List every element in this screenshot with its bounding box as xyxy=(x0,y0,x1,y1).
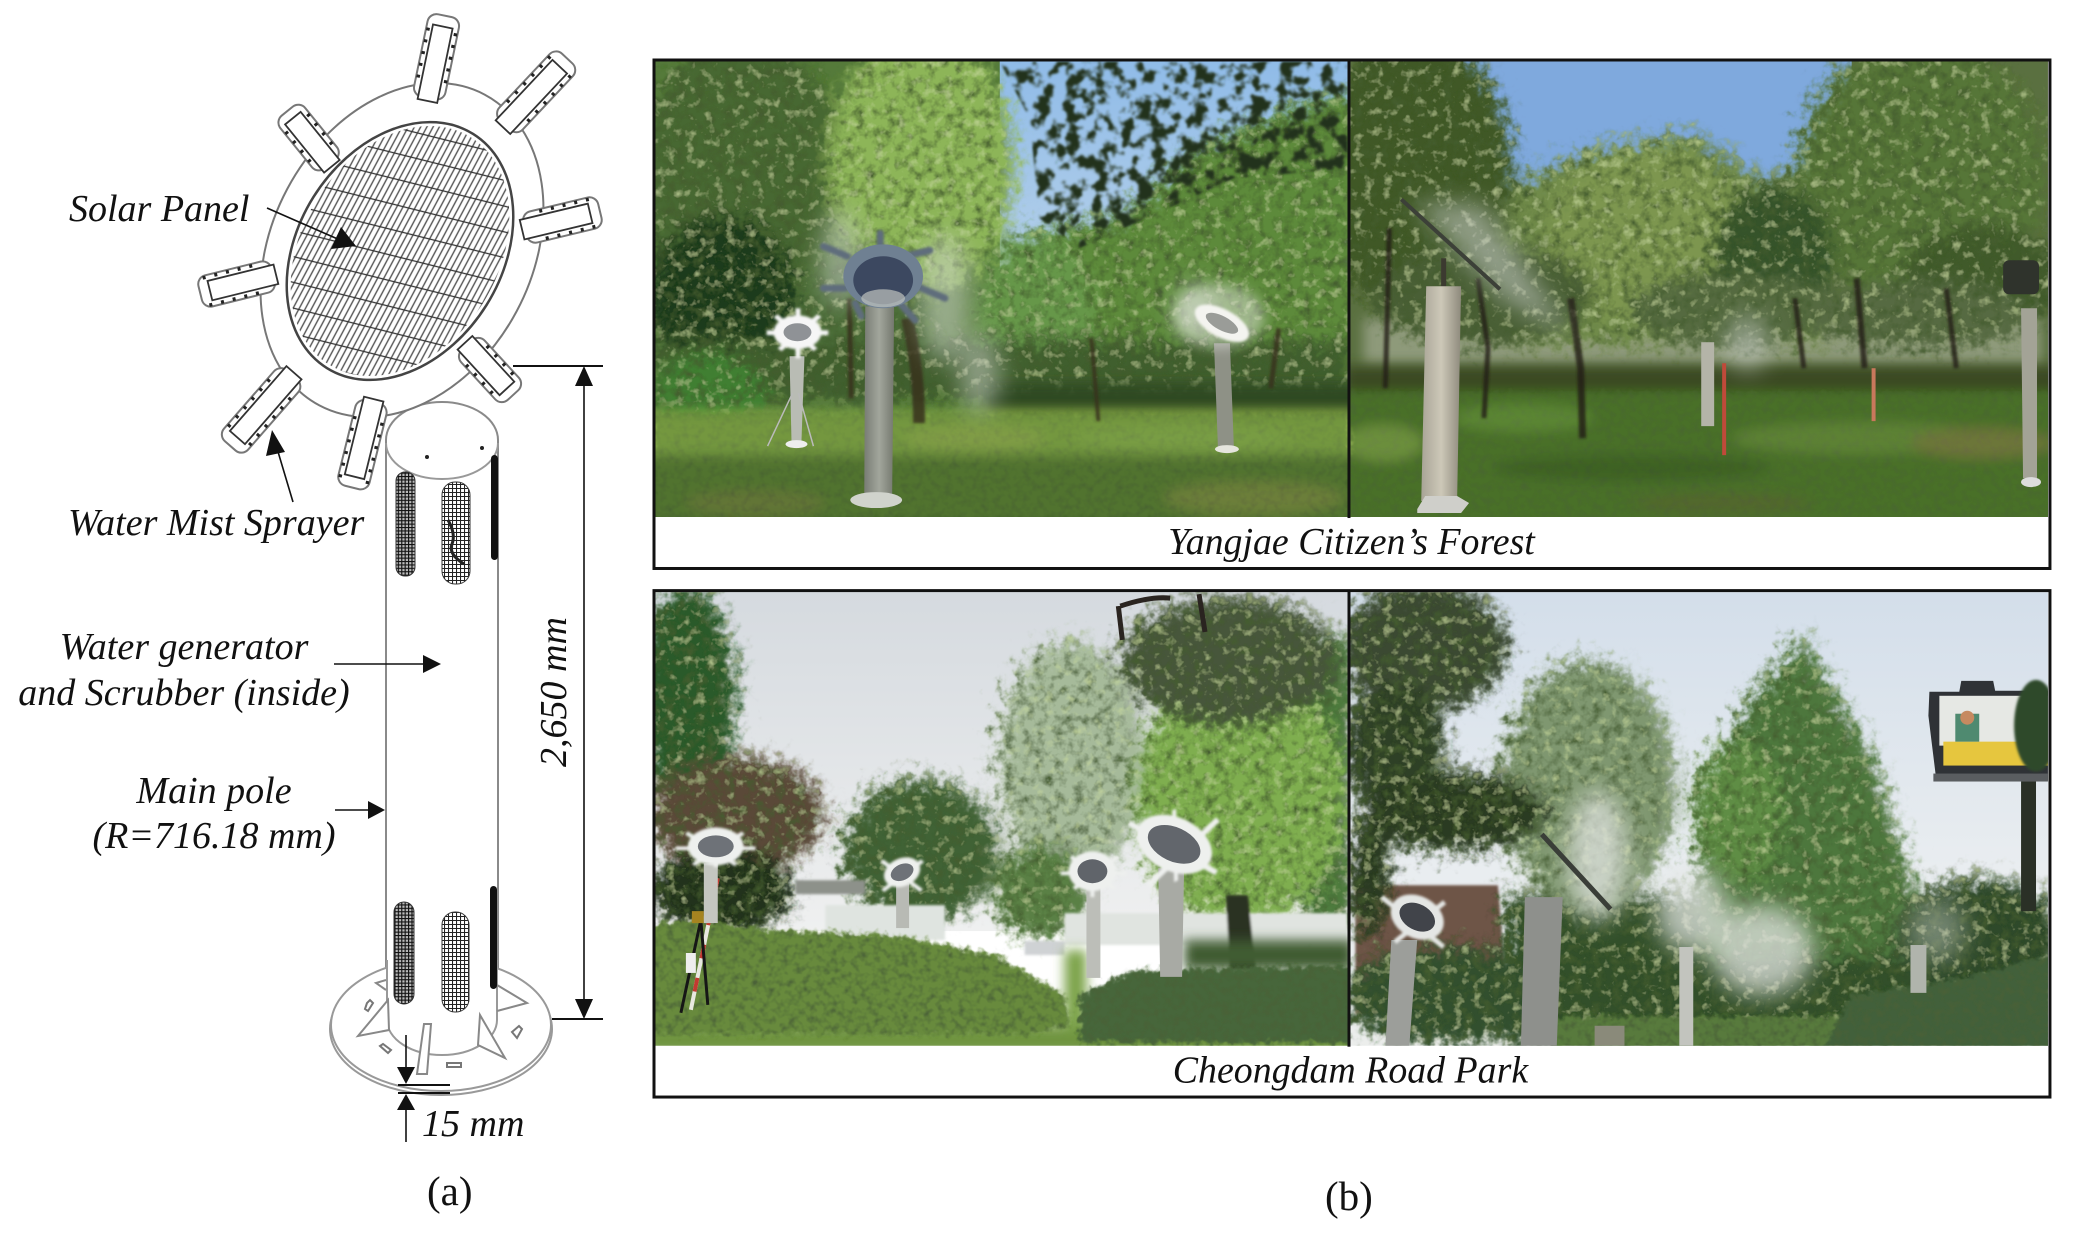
equipment box xyxy=(1595,1026,1624,1046)
trunks xyxy=(1385,228,1956,438)
hedge and grass xyxy=(1553,955,2051,1052)
dimension: height 2,650 mm: 2,650 mm xyxy=(533,617,575,767)
panel (b): Cheongdam Road Park photos xyxy=(636,581,2061,1097)
branch xyxy=(1118,594,1205,640)
arrow: main pole xyxy=(335,801,385,819)
label: solar panel: Solar Panel xyxy=(69,188,249,230)
label: water generator and scrubber: Water generator xyxy=(60,626,309,668)
label: water mist sprayer: Water Mist Sprayer xyxy=(68,502,364,544)
photo: Yangjae left view xyxy=(656,62,1348,517)
tree canopy xyxy=(1350,62,2048,364)
panel (a): sprayer technical drawing xyxy=(18,13,604,1214)
sprayer A xyxy=(676,827,756,923)
base plate xyxy=(330,940,552,1095)
photo: Cheongdam left view xyxy=(636,586,1363,1055)
divider xyxy=(1347,591,1350,1047)
photo: Cheongdam right view xyxy=(1339,581,2061,1052)
caption (a): (a) xyxy=(427,1168,473,1214)
photo: Yangjae right view xyxy=(1350,62,2048,517)
overhanging dark leaves xyxy=(1000,61,1347,248)
dimension: thickness 15 mm xyxy=(397,1035,524,1145)
sprayer: large pole, side view xyxy=(1521,834,1611,1047)
sprayer: small pole xyxy=(1679,947,1693,1047)
hedge and grass xyxy=(1344,366,2061,521)
arrow: solar panel xyxy=(267,208,356,249)
dimension: height 2,650 mm xyxy=(513,366,603,1019)
sprayer: centre dark xyxy=(823,233,945,508)
hedge and grass xyxy=(646,383,1363,526)
sprayer: left white xyxy=(767,308,828,448)
main pole xyxy=(386,402,498,1056)
panel (b): Yangjae Citizen's Forest photos xyxy=(636,34,2061,568)
sprayer: right xyxy=(1173,284,1265,453)
sprayer: right edge xyxy=(2003,260,2041,487)
solar panel xyxy=(285,120,514,382)
mist xyxy=(820,208,1214,413)
mist xyxy=(1568,790,1966,995)
building xyxy=(1355,885,1508,1015)
divider xyxy=(1347,60,1350,518)
caption: Yangjae Citizen's Forest: Yangjae Citizen’s Forest xyxy=(1168,521,1536,563)
sprayer D xyxy=(1127,803,1222,977)
tree canopy xyxy=(636,586,1353,938)
ranging pole xyxy=(1872,368,1876,421)
caption (b): (b) xyxy=(1325,1173,1373,1219)
sky xyxy=(1000,62,1348,268)
label: main pole: Main pole xyxy=(135,770,292,812)
lower ventilation slots xyxy=(394,886,497,1012)
sprayer B xyxy=(879,852,925,928)
ranging pole and tripod xyxy=(681,878,718,1013)
frame xyxy=(654,591,2050,1097)
mist xyxy=(1413,203,1767,371)
background band xyxy=(1363,318,2041,364)
wall and overpass xyxy=(795,880,1347,970)
sky xyxy=(1463,54,1852,258)
hedges and ground xyxy=(646,940,1363,1055)
tree canopy xyxy=(656,62,1348,413)
label: main pole: (R=716.18 mm) xyxy=(92,815,336,857)
sprayer C xyxy=(1061,851,1126,978)
pole top cap and holes xyxy=(386,443,498,479)
frame xyxy=(654,60,2050,568)
label: water generator and scrubber: and Scrubber (inside) xyxy=(18,672,350,714)
dimension: thickness 15 mm: 15 mm xyxy=(422,1103,524,1145)
sprayer: far pole xyxy=(1701,342,1726,455)
tree canopy xyxy=(1339,581,2061,1045)
sprayer: near pole, side view xyxy=(1401,199,1500,513)
sprayer: near left head xyxy=(1380,886,1452,1047)
trunks xyxy=(849,298,1279,423)
arrow: water generator xyxy=(334,655,441,673)
arrow: water mist sprayer xyxy=(266,430,293,502)
caption: Cheongdam Road Park: Cheongdam Road Park xyxy=(1173,1050,1529,1092)
sprayer outer ring xyxy=(205,34,599,466)
upper ventilation slots xyxy=(396,455,498,584)
sprayer: far pole xyxy=(1910,945,1926,993)
billboard xyxy=(1928,680,2058,911)
mist nozzle arms xyxy=(196,13,604,491)
